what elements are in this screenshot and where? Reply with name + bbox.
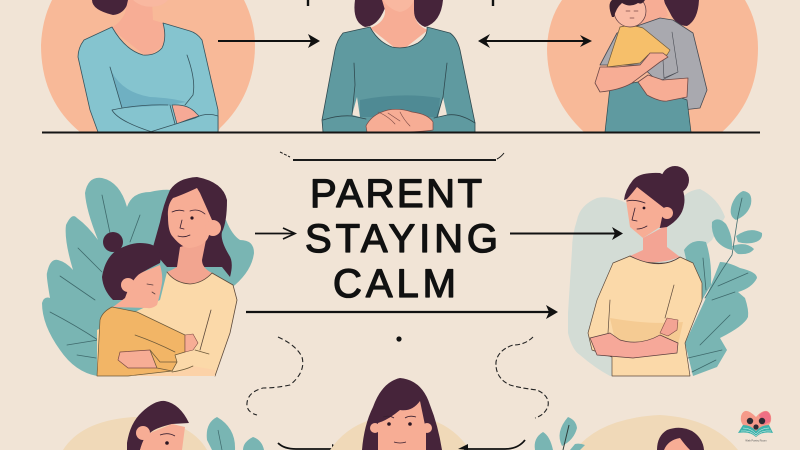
panel: woman with bun, crossed arms, plant xyxy=(568,166,762,376)
arrow: bottom right to center xyxy=(458,440,525,450)
title: Parent Staying Calm: STAYING xyxy=(305,217,498,261)
panel: mother hugging child with leaves xyxy=(42,177,254,376)
title: Parent Staying Calm: CALM xyxy=(333,262,456,306)
center dot xyxy=(396,336,402,342)
logo: heart and open book xyxy=(738,411,773,442)
panel: bottom-right woman with plant xyxy=(535,415,738,450)
title: Parent Staying Calm: PARENT xyxy=(310,172,482,216)
title decoration rule xyxy=(280,152,504,160)
panel: top-right circle with woman holding baby xyxy=(547,0,758,132)
dashed curve: right xyxy=(496,337,548,418)
arrow: two-way, center to right xyxy=(478,34,592,48)
arrow: top-left to top-center xyxy=(218,34,320,48)
panel: bottom-left parent looking down xyxy=(63,401,264,450)
arrow: bottom left to center xyxy=(278,443,342,450)
arrow: title to right panel xyxy=(510,227,623,240)
panel: top-left woman with crossed arms xyxy=(41,0,255,132)
dashed curve: left xyxy=(247,337,303,415)
arrow: long horizontal under title xyxy=(246,305,558,319)
arrow: left panel to title xyxy=(255,228,295,239)
top panel baseline xyxy=(42,132,760,134)
top connector ticks xyxy=(308,0,493,6)
panel: bottom-center smiling woman xyxy=(330,378,470,450)
title: Parent Staying Calm xyxy=(305,172,498,306)
logo: heart and open book: Web Poetry Room xyxy=(745,438,767,442)
panel: top-center woman with folded hands xyxy=(322,0,475,132)
